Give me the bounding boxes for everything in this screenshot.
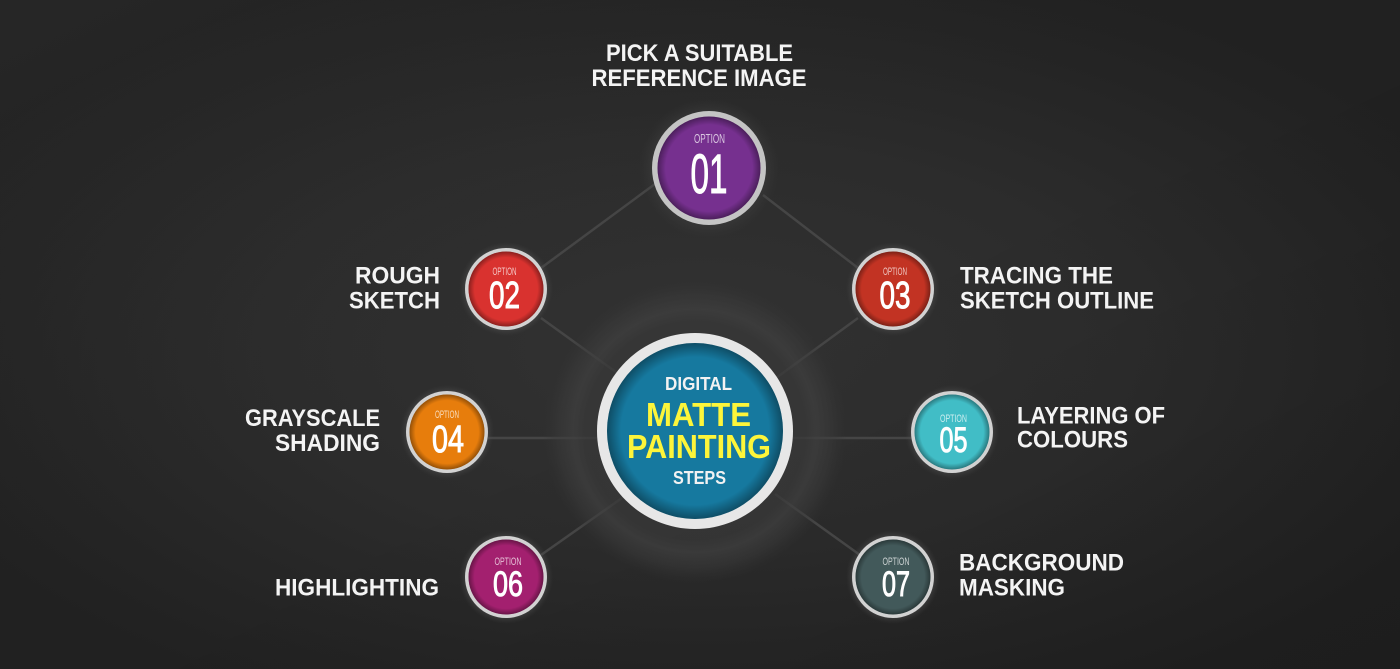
step 07 (846, 530, 1124, 624)
central hub: Digital Matte Painting Steps (543, 279, 847, 583)
step 06 (275, 530, 553, 624)
step 05: 05 (940, 421, 968, 460)
central hub: Digital Matte Painting Steps: DIGITAL (665, 374, 732, 394)
step 07: 07 (882, 565, 910, 604)
label: grayscale shading: SHADING (275, 430, 380, 457)
label: layering of colours: COLOURS (1017, 426, 1128, 454)
label: background masking: BACKGROUND (959, 550, 1124, 576)
label: layering of colours (1017, 402, 1165, 454)
step 03: OPTION (883, 266, 907, 278)
label: background masking (959, 550, 1124, 602)
step 02: OPTION (492, 266, 517, 278)
step 03 (846, 242, 1154, 336)
step 07: OPTION (882, 556, 910, 568)
label: rough sketch: ROUGH (355, 262, 440, 290)
label: tracing the sketch outline: TRACING THE (960, 262, 1113, 290)
step 01: 01 (690, 142, 728, 205)
step 04 (245, 385, 494, 479)
step 04: 04 (432, 419, 464, 461)
label: rough sketch: SKETCH (349, 288, 440, 314)
label: layering of colours: LAYERING OF (1017, 402, 1165, 430)
step 05 (905, 385, 1165, 479)
central hub: Digital Matte Painting Steps: STEPS (673, 468, 726, 488)
step 01: OPTION (694, 131, 725, 146)
step 06: OPTION (494, 556, 522, 568)
central hub: Digital Matte Painting Steps: PAINTING (627, 428, 771, 465)
label: tracing the sketch outline (960, 262, 1154, 314)
label: highlighting: HIGHLIGHTING (275, 574, 439, 602)
label: grayscale shading: GRAYSCALE (245, 405, 380, 432)
label: grayscale shading (245, 405, 380, 457)
step 01 (592, 40, 806, 238)
label: tracing the sketch outline: SKETCH OUTLINE (960, 288, 1154, 314)
label: background masking: MASKING (959, 574, 1065, 602)
step 02: 02 (489, 275, 520, 317)
step 04: OPTION (435, 409, 459, 421)
step 06: 06 (493, 565, 523, 604)
label: rough sketch (349, 262, 440, 314)
step 05: OPTION (940, 413, 967, 425)
step 02 (349, 242, 553, 336)
label: pick a suitable reference image: PICK A SUITABLE (606, 40, 793, 67)
label: pick a suitable reference image: REFERENCE IMAGE (592, 65, 806, 92)
connector lines (488, 184, 912, 555)
label: pick a suitable reference image (592, 40, 806, 92)
step 03: 03 (880, 275, 910, 317)
central hub: Digital Matte Painting Steps: MATTE (646, 396, 751, 433)
